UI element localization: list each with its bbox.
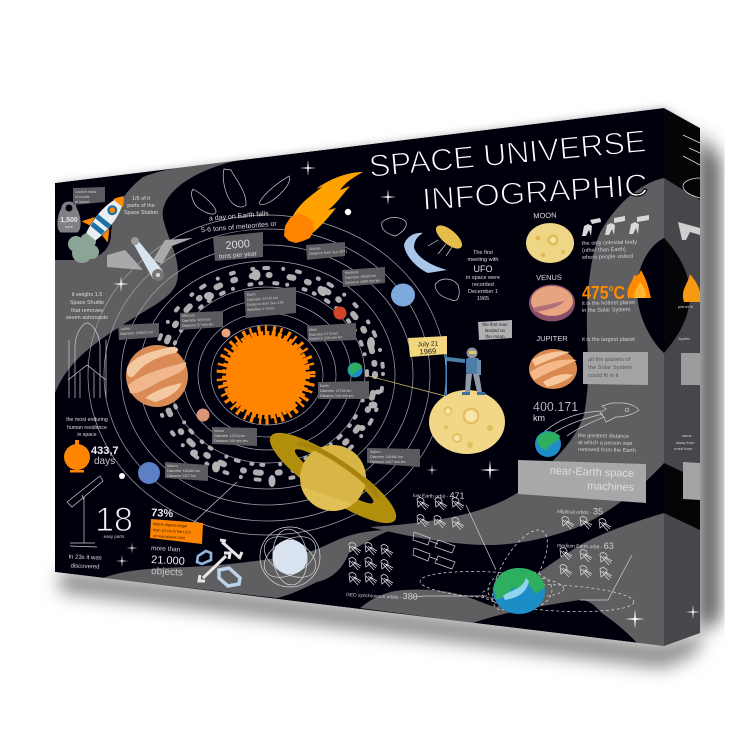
planet info boxes: Distance 1427 km [167,474,196,478]
planet info boxes: Distance from Sun 2871 [309,249,348,256]
sun [222,331,310,419]
planet info boxes: Diameter 12742 km [247,296,278,302]
stars upper [300,160,396,215]
flag pole [446,337,447,396]
planet info boxes: Saturn [167,464,178,468]
weight icon: 1,500 tons: tons [65,224,73,229]
orange callout box [150,519,203,544]
text: jupiter: it is the largest planet [582,337,635,343]
canvas side face: planet in [678,304,693,309]
elliptical orbits group: elliptical orbits - 35 [557,505,603,517]
stat box: 2000 tons per year: 2000 [225,238,250,252]
moon disc [526,223,574,263]
planet info boxes: Distance from Sun 149 [247,300,284,307]
stat: 475 degrees: o [609,283,614,293]
star [113,276,129,292]
meteor text: a day on Earth falls [209,210,270,223]
canvas drop shadow [55,108,720,668]
meteorite outlines [192,169,290,214]
title: SPACE UNIVERSE [367,123,647,184]
dashed orbits around earth [419,522,635,618]
planet: pink [196,408,210,422]
box: all planets fit: the Solar System [588,365,632,371]
telescope [67,476,103,547]
background swoosh: top left [55,160,236,393]
low Earth orbit group [413,489,496,570]
box: all planets fit: all the planets of [588,357,631,363]
box: rocket caption: of shuttle [75,195,90,199]
callout line [193,482,237,523]
stars middle [427,460,500,480]
planet info boxes: Diameter 116460 km [370,455,403,459]
planet info boxes: Jupiter [120,326,132,331]
canvas side face: same [682,433,693,438]
weight icon: 1,500 tons: 1,500 [60,217,78,224]
stat: 400.171 km: 400.171 [533,400,578,414]
stat: 21.000 objects: objects [151,566,183,579]
text: first UFO meeting [466,250,500,302]
box: rocket caption: at launch [75,200,90,204]
stat: 400.171 km [533,400,578,423]
stat: 21.000 objects: more than [151,545,181,554]
comet [284,172,363,243]
planet: mercury [222,328,230,338]
stat: 18 moons: easy parts [104,534,125,539]
icon: orange capsule [64,440,90,472]
text: greatest distance: the greatest distance [578,433,629,440]
large moon [429,390,505,454]
text: moon [581,240,637,261]
text: first UFO meeting: 1965 [477,296,489,302]
satellite pair outlines [413,532,455,569]
weight icon: 1,500 tons [58,202,80,232]
planet: blue [138,462,160,484]
canvas side face [664,108,702,646]
stars lower left [116,543,137,567]
planet info boxes: Diameter 49528 km [345,274,376,280]
icon: three astronauts with flags [582,215,649,236]
planet info boxes: Diameter 6779 km [309,331,338,337]
planet: saturn [270,432,396,524]
text: space shuttle: Space Shuttle [70,300,104,306]
icon: debris sphere with orbit web [257,527,323,587]
solar system orbits [88,215,446,535]
text: moon: the only celestial body [582,240,637,247]
planet: earth small [348,362,362,378]
space station satellite [107,237,193,281]
title: INFOGRAPHIC [421,167,649,217]
text: first UFO meeting: December 1 [468,289,498,295]
earth: farthest distance [535,431,561,457]
planet info boxes: Distance 108 mln km [214,439,248,443]
medium Earth orbit group [557,539,632,600]
text: discovered: In 23x it was [68,554,102,562]
box: first man on the moon: the first man [482,322,508,327]
canvas side face: rmed from [674,446,693,451]
stat: 18 moons: 18 [95,501,133,539]
planet info boxes: Neptune [345,270,359,275]
planet info boxes: Mercury [182,313,195,318]
box: rocket caption: Launch mass [75,190,97,194]
stat: 433,7 days [91,446,118,466]
background swoosh: right ring [370,178,664,545]
stat: 21.000 objects: 21.000 [151,554,185,568]
text: discovered [68,554,102,568]
stat box: 2000 tons per year: tons per year [219,250,258,261]
link from earth to moon [365,375,445,396]
planet info boxes: Distance 57 mln km [182,322,214,328]
text: space shuttle: it weighs 1.5 [72,292,102,298]
text: moon: (other than Earth) [582,247,626,254]
stat: 21.000 objects [151,545,185,579]
planet: mars [334,306,346,320]
stat: 475 degrees: C [613,283,625,303]
large earth [493,568,545,614]
text: venus [582,300,635,314]
box: near-Earth space machines: machines [587,480,635,494]
canvas front face [55,108,664,646]
text: first UFO meeting: UFO [474,264,492,274]
GEO orbit group: GEO synchronous orbits - 380 [346,588,418,602]
text: greatest distance [578,433,636,454]
stat box: 2000 tons per year [213,232,263,261]
jupiter disc [529,349,577,389]
UFO [404,221,466,273]
alien outlines [382,217,459,301]
planet info boxes: Distance 1427 mln km [370,460,406,464]
orange callout box: than 10 cm in the LEO [153,528,191,535]
shuttle outline [68,323,106,398]
text: space station: parts of the [127,203,155,209]
planet info boxes: Mars [309,328,317,332]
rocket with smoke [68,196,124,263]
text: longest residence [66,417,108,438]
planet info boxes: Diameter 12742 km [320,389,351,393]
text: first UFO meeting: The first [473,250,493,256]
canvas side face: away from [676,440,695,445]
meteor text [201,210,278,234]
background swoosh: lower right [360,513,664,646]
text: space station: Space Station [124,210,158,216]
planet info boxes: Uranus [309,246,321,251]
box: rocket caption [73,187,105,205]
planet info boxes: Venus [214,429,224,433]
text: venus: it is the hottest planet [582,300,635,307]
venus disc [529,284,575,322]
medium Earth orbit group: medium Earth orbit - 63 [557,539,614,551]
planet info boxes: Distance 149 mln km [320,394,354,398]
star bottom right [625,609,645,629]
stat: 73 percent: 73% [151,507,174,520]
box: near-Earth space machines: near-Earth space [550,465,634,480]
canvas side face: Jupiter [678,336,691,341]
stat: 475 degrees: 475 [582,283,612,303]
text: discovered: discovered [70,563,100,571]
box: first man on the moon: landed on [485,328,506,333]
box: first man on the moon [478,320,512,340]
planet info boxes [118,242,420,481]
box: all planets fit [583,352,648,385]
icon: fire [627,270,651,298]
title [367,123,649,217]
box: all planets fit: could fit in it [588,373,619,379]
planet info boxes: Earth [320,384,329,388]
asteroid belt [153,268,383,487]
text: first UFO meeting: in space were [466,275,500,281]
planet info boxes: Earth [247,292,256,297]
text: longest residence: human residence [67,425,107,431]
planet info boxes: Distance 228 mln km [309,335,343,341]
box: near-Earth space machines [518,460,646,503]
label: moon: MOON [533,211,557,220]
text: moon: where people visited [581,254,633,261]
planet info boxes: Diameter 116460 km [167,469,200,473]
text: space shuttle: seven astronauts [66,315,108,321]
label: jupiter: JUPITER [536,334,568,343]
flag: July 21 1969: 1969 [419,347,436,356]
rocket outline with trails [544,403,639,436]
orange callout box: debris objects larger [153,522,188,528]
stat: 433,7 days: 433,7 [91,445,119,457]
label: venus: VENUS [536,273,562,282]
planet info boxes: Diameter 4879 km [182,317,211,323]
icon: wrenches and nuts [197,540,242,586]
planet info boxes: Distance 4498 mln km [345,279,381,285]
planet info boxes: Diameter 139822 km [120,330,153,336]
text: greatest distance: at which a person was [578,440,633,447]
text: space shuttle: that removes [71,308,103,314]
star [119,473,125,479]
planet: neptune [391,284,415,306]
background swoosh: bottom left [103,530,392,598]
text: space station [124,196,158,216]
box: first man on the moon: the moon [485,334,505,339]
planet info boxes: Satellites 1 moon [247,306,275,312]
moon with astronaut and flag [365,320,512,454]
text: first UFO meeting: recorded [472,282,494,288]
astronaut [447,348,485,395]
flag: July 21 1969 [408,336,447,357]
orange callout box: of near-planet orbit [153,534,186,540]
planet info boxes: Diameter 12104 km [214,434,245,438]
text: venus: in the Solar System [582,307,631,314]
text: greatest distance: removed from the Earth [578,447,636,454]
planet: jupiter on orbit [126,345,188,407]
text: space shuttle [66,292,108,321]
planet info boxes: Saturn [370,450,381,454]
text: longest residence: the most enduring [66,417,108,423]
flag: July 21 1969: July 21 [417,340,439,349]
text: longest residence: in space [77,432,97,438]
elliptical orbits group [557,505,611,531]
low Earth orbit group: low Earth orbit - 471 [413,489,465,501]
GEO orbit group [346,543,487,602]
text: first UFO meeting: meeting with [468,257,498,263]
stat: 433,7 days: days [94,456,115,467]
stat: 400.171 km: km [533,413,545,423]
meteor text: 5-6 tons of meteorites or [201,221,278,234]
text: space station: 1/6 of it [132,196,150,202]
